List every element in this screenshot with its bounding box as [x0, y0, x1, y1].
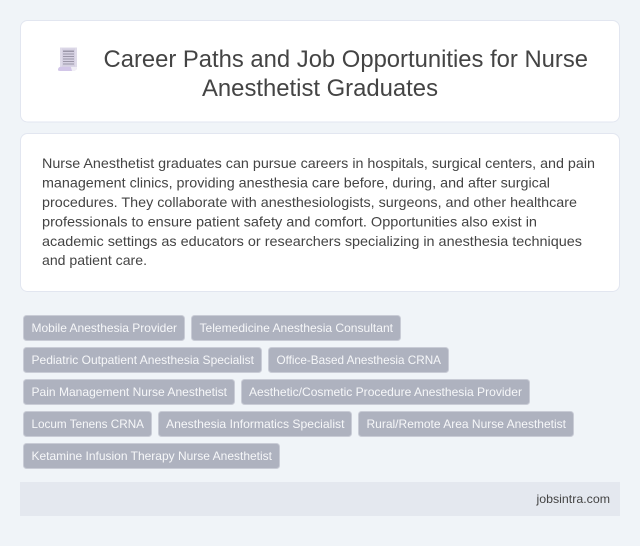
panel: description [20, 134, 620, 292]
tag: Office-Based Anesthesia CRNA: Office-Based Anesthesia CRNA [276, 353, 441, 367]
tag: Pediatric Outpatient Anesthesia Specialist: Pediatric Outpatient Anesthesia Specialist [32, 353, 255, 367]
tag: Ketamine Infusion Therapy Nurse Anesthetist [24, 444, 280, 468]
tag: Anesthesia Informatics Specialist: Anesthesia Informatics Specialist [166, 417, 345, 431]
tag: Pain Management Nurse Anesthetist: Pain Management Nurse Anesthetist [32, 385, 228, 399]
tag list [24, 316, 574, 468]
tag: Aesthetic/Cosmetic Procedure Anesthesia Provider: Aesthetic/Cosmetic Procedure Anesthesia Provider [249, 385, 522, 399]
tag: Anesthesia Informatics Specialist [158, 412, 352, 436]
tag: Locum Tenens CRNA: Locum Tenens CRNA [32, 417, 144, 431]
icon: document scroll [58, 48, 77, 71]
title [104, 46, 588, 102]
tag: Pain Management Nurse Anesthetist [24, 380, 234, 404]
description text: professionals to ensure patient safety and comfort. Opportunities also exist in [42, 214, 537, 230]
title: Career Paths and Job Opportunities for Nurse [104, 46, 588, 73]
footer [20, 482, 620, 516]
tag: Mobile Anesthesia Provider [24, 316, 184, 340]
tag: Mobile Anesthesia Provider: Mobile Anesthesia Provider [32, 321, 177, 335]
footer source text: jobsintra.com [535, 492, 610, 506]
panel: header [20, 20, 620, 122]
tag: Rural/Remote Area Nurse Anesthetist: Rural/Remote Area Nurse Anesthetist [366, 417, 567, 431]
tag: Ketamine Infusion Therapy Nurse Anesthetist: Ketamine Infusion Therapy Nurse Anesthetist [32, 449, 273, 463]
description text: Nurse Anesthetist graduates can pursue careers in hospitals, surgical centers, and pain [42, 155, 595, 171]
description text: academic settings as educators or researchers specializing in anesthesia techniques [42, 233, 582, 249]
title: Anesthetist Graduates [202, 75, 438, 102]
tag: Locum Tenens CRNA [24, 412, 152, 436]
description text: management clinics, providing anesthesia care before, during, and after surgical [42, 174, 550, 190]
tag: Office-Based Anesthesia CRNA [268, 348, 448, 372]
tag: Aesthetic/Cosmetic Procedure Anesthesia Provider [242, 380, 530, 404]
description text [42, 155, 595, 268]
description text: procedures. They collaborate with anesthesiologists, surgeons, and other healthcare [42, 194, 577, 210]
tag: Rural/Remote Area Nurse Anesthetist [358, 412, 574, 436]
tag: Telemedicine Anesthesia Consultant: Telemedicine Anesthesia Consultant [200, 321, 394, 335]
description text: and patient care. [42, 252, 147, 268]
tag: Telemedicine Anesthesia Consultant [192, 316, 400, 340]
tag: Pediatric Outpatient Anesthesia Specialist [24, 348, 262, 372]
